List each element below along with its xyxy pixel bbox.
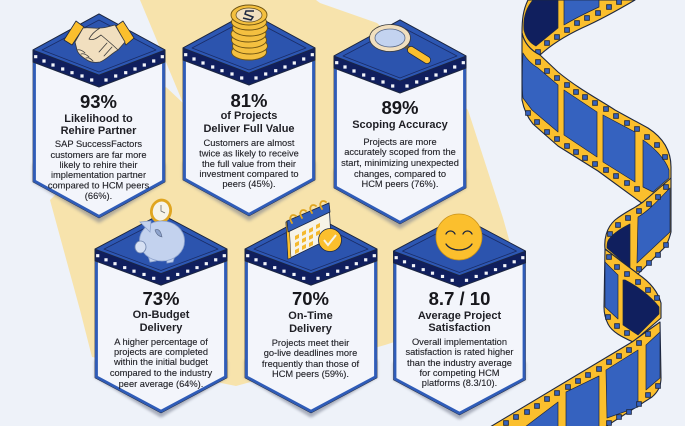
description: customers are far more — [50, 150, 147, 160]
description: Overall implementation — [412, 337, 507, 347]
description: HCM peers (59%). — [272, 369, 349, 379]
heading: Delivery — [140, 322, 183, 334]
description: start, minimizing unexpected — [341, 158, 459, 168]
heading: Average Project — [418, 310, 502, 322]
description: Projects are more — [363, 137, 437, 147]
card shape — [245, 214, 377, 418]
heading: Rehire Partner — [61, 125, 137, 137]
description: the full value from their — [202, 159, 296, 169]
description: compared to the industry — [110, 368, 213, 378]
description: peers (45%). — [222, 179, 276, 189]
description: changes, compared to — [354, 169, 446, 179]
card shape — [394, 216, 526, 420]
heading: Delivery — [289, 323, 333, 335]
stat: 70%: 70% — [292, 288, 329, 309]
stat: 81%: 81% — [230, 90, 268, 111]
icon: handshake — [64, 21, 134, 62]
heading: Scoping Accuracy — [352, 119, 449, 131]
card: average project satisfaction — [394, 214, 526, 420]
description: compared to HCM peers — [48, 180, 149, 190]
film strip — [490, 0, 671, 426]
description: platforms (8.3/10). — [422, 378, 497, 388]
description: frequently than those of — [262, 359, 359, 369]
description: go-live deadlines more — [264, 348, 357, 358]
stat: 93%: 93% — [80, 91, 117, 112]
description: within the initial budget — [113, 357, 208, 367]
stat: 73%: 73% — [142, 288, 180, 309]
description: A higher percentage of — [114, 337, 208, 347]
card shape — [183, 12, 315, 221]
icon: calendar with check — [286, 201, 342, 259]
card: on-time delivery — [245, 201, 377, 418]
description: SAP SuccessFactors — [55, 139, 142, 149]
description: accurately scoped from the — [344, 147, 456, 157]
description: HCM peers (76%). — [362, 179, 438, 189]
icon: magnifying glass — [370, 24, 427, 60]
stat: 89%: 89% — [381, 97, 419, 118]
heading: Deliver Full Value — [203, 123, 295, 135]
description: peer average (64%). — [119, 379, 203, 389]
heading: Satisfaction — [428, 322, 491, 334]
description: implementation partner — [51, 170, 146, 180]
card: likelihood to rehire partner — [33, 14, 165, 223]
description: satisfaction is rated higher — [405, 347, 514, 357]
description: twice as likely to receive — [199, 148, 299, 158]
description: investment compared to — [199, 169, 299, 179]
icon: coin stack — [231, 5, 268, 60]
icon: piggy bank — [135, 198, 184, 263]
description: than the industry average — [407, 358, 512, 368]
description: Projects meet their — [272, 338, 349, 348]
card shape — [334, 20, 466, 229]
stat: 8.7 / 10: 8.7 / 10 — [429, 288, 490, 309]
heading: of Projects — [221, 110, 277, 122]
card: scoping accuracy — [334, 20, 466, 229]
card shape — [95, 214, 227, 418]
description: (66%). — [85, 191, 112, 201]
card: on-budget delivery — [95, 198, 227, 418]
card: projects deliver full value — [183, 5, 315, 221]
description: for competing HCM — [419, 368, 500, 378]
background yellow shape — [50, 0, 526, 386]
card shape — [33, 14, 165, 223]
description: Customers are almost — [204, 138, 295, 148]
heading: On-Time — [288, 310, 333, 322]
description: likely to rehire their — [59, 160, 138, 170]
heading: On-Budget — [133, 309, 190, 321]
description: projects are completed — [114, 347, 208, 357]
icon: smiley face — [436, 214, 482, 260]
heading: Likelihood to — [64, 113, 133, 125]
